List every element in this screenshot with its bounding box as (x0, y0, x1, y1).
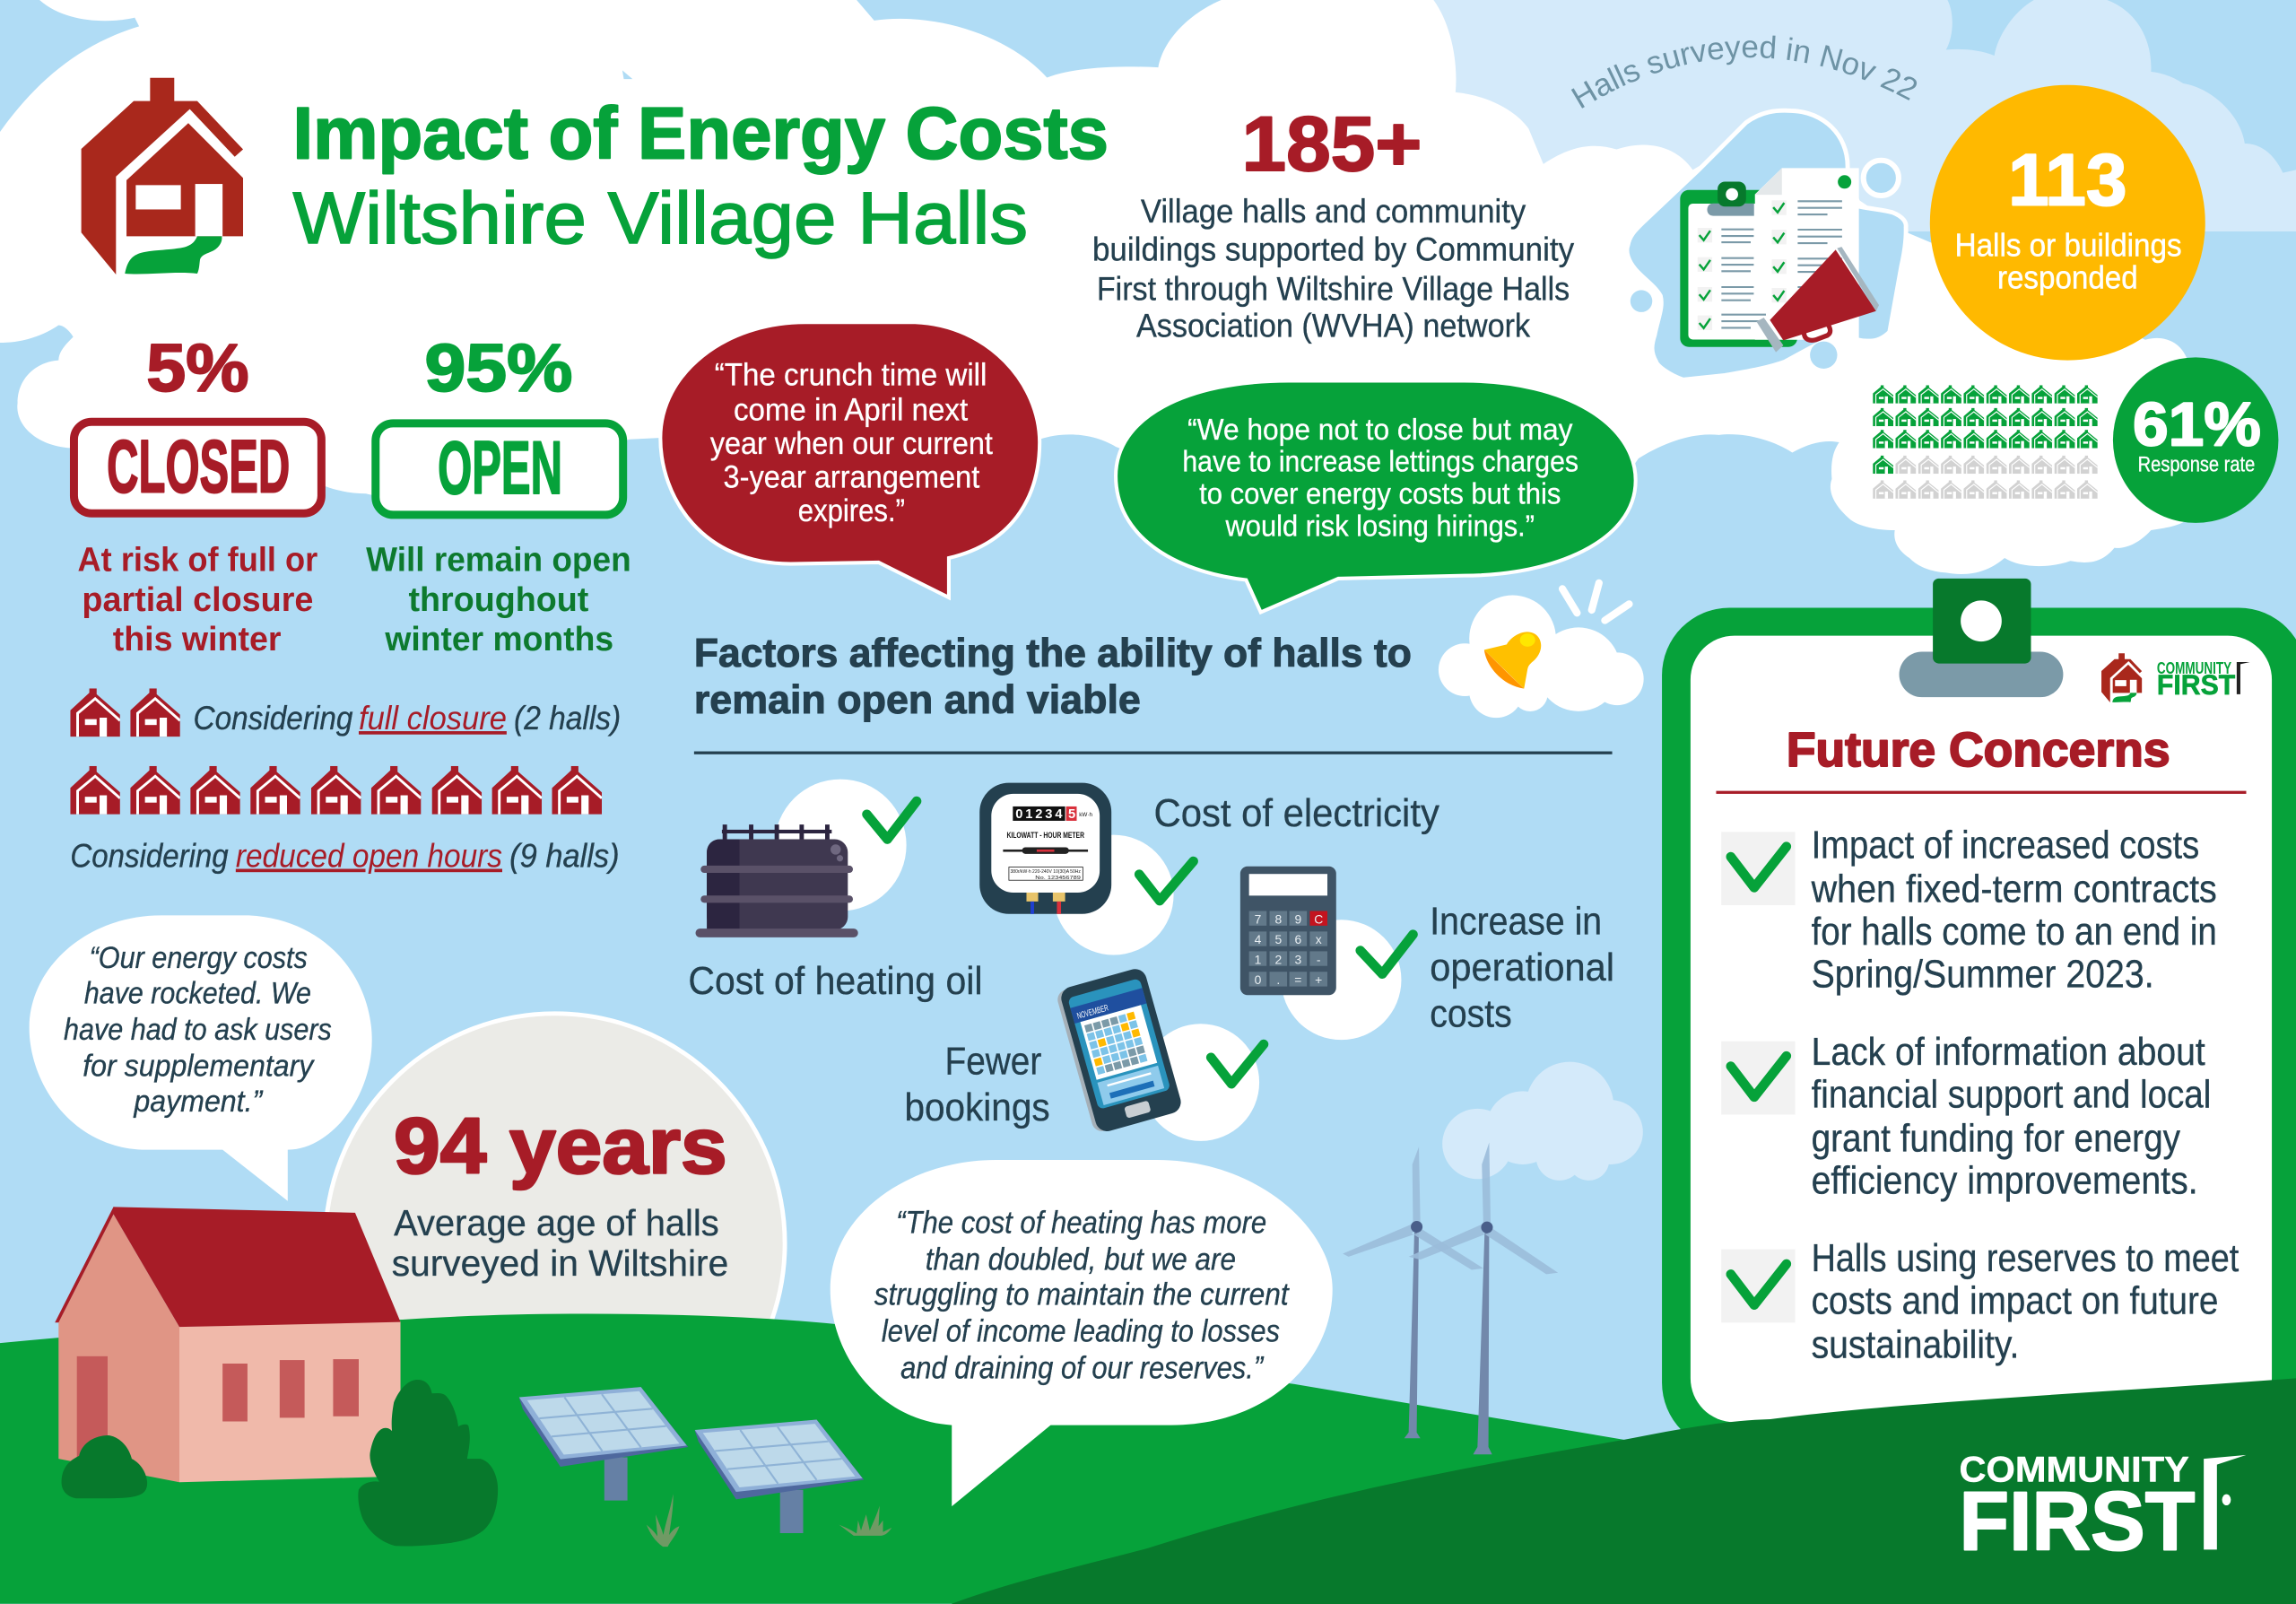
blob behind clipboard (1627, 110, 1906, 379)
check mark (1211, 1044, 1264, 1084)
green circle: 61 percent response rate: 61% (2133, 389, 2261, 458)
closed sign: CLOSED (107, 425, 290, 509)
concern 1: Spring/Summer 2023. (1812, 953, 2154, 996)
icons: 2 halls (70, 688, 180, 737)
full closure label: (2 halls) (514, 700, 621, 737)
label: costs (1430, 992, 1512, 1035)
closed stat (74, 330, 321, 658)
yellow circle: 113 responses: responded (1997, 259, 2138, 296)
concern 1: when fixed-term contracts (1811, 868, 2217, 911)
megaphone (1770, 249, 1876, 340)
concern 3: sustainability. (1812, 1323, 2019, 1366)
clipboard board (1680, 190, 1797, 347)
94 years caption: surveyed in Wiltshire (392, 1242, 728, 1284)
open sign: OPEN (438, 426, 562, 510)
white quote bubble: energy costs: payment.” (133, 1085, 264, 1119)
curved label: halls surveyed: Halls surveyed in Nov 22 (1571, 36, 1918, 109)
icon: calculator: 7 (1255, 911, 1262, 926)
185+ stat (1092, 101, 1575, 344)
reduced hours label (70, 838, 620, 875)
concern 1 (1721, 824, 2217, 996)
green circle: 61 percent response rate (2113, 357, 2278, 523)
concern 2: efficiency improvements. (1812, 1160, 2198, 1203)
185 description (1092, 193, 1575, 344)
concern 3: costs and impact on future (1812, 1279, 2218, 1322)
icon: bell on cloud (1439, 583, 1644, 718)
185 description: Association (WVHA) network (1136, 308, 1531, 344)
hall side wall (58, 1214, 179, 1482)
icon: phone with calendar: NOVEMBER (1076, 1003, 1109, 1022)
icon: electricity meter (979, 783, 1111, 914)
white quote bubble: cost of heating: level of income leading to losses (882, 1314, 1280, 1349)
icon: calculator: 3 (1294, 952, 1301, 966)
94 years caption: Average age of halls (394, 1202, 719, 1243)
white quote bubble: energy costs: “Our energy costs (90, 941, 308, 975)
factors heading: remain open and viable (694, 678, 1141, 722)
icon: phone with calendar (1055, 966, 1184, 1135)
bell cloud (1439, 596, 1644, 718)
bell rays (1562, 583, 1629, 621)
icon: calculator: 4 (1255, 932, 1262, 946)
yellow circle: 113 responses (1930, 85, 2205, 361)
checklist rows (1698, 200, 1842, 330)
check mark (867, 801, 917, 840)
green quote bubble: “We hope not to close but may (1187, 414, 1573, 447)
white disc (775, 780, 907, 911)
white quote bubble: cost of heating: than doubled, but we are (926, 1242, 1236, 1277)
factors heading: Factors affecting the ability of halls to (694, 632, 1412, 676)
community first logo: FIRST (1959, 1474, 2195, 1567)
clipboard clip (1707, 204, 1754, 216)
factors heading (694, 632, 1412, 722)
icon: electricity meter: kW·h (1079, 812, 1092, 818)
closed caption (78, 541, 318, 658)
icon: calculator: 2 (1274, 952, 1282, 966)
concern 2 (1721, 1031, 2211, 1203)
solar panel left (519, 1387, 688, 1501)
checklist paper (1755, 168, 1859, 340)
hall front wall (179, 1321, 401, 1482)
yellow circle: 113 responses: 113 (2008, 140, 2126, 222)
concern 1: Impact of increased costs (1812, 824, 2199, 867)
pictogram: 61 percent of halls (1873, 385, 2098, 499)
wind turbine left (1343, 1146, 1483, 1438)
closed caption: this winter (113, 620, 282, 658)
icon: calculator: . (1276, 972, 1280, 987)
concern 2: grant funding for energy (1812, 1117, 2180, 1160)
reduced hours row (70, 766, 620, 875)
grass tufts (647, 1494, 891, 1547)
icon: calculator: x (1316, 932, 1322, 946)
reduced hours label: reduced open hours (236, 838, 502, 875)
label: Fewer (945, 1041, 1041, 1084)
open caption: Will remain open (366, 541, 631, 579)
white quote bubble: cost of heating: “The cost of heating has more (896, 1206, 1266, 1241)
factor: fewer bookings (904, 966, 1264, 1141)
grey circle: 94 years (325, 1014, 785, 1473)
concern 1: for halls come to an end in (1812, 911, 2217, 954)
icon: main house logo (82, 78, 243, 275)
94 years text (392, 1101, 728, 1284)
full closure row (70, 688, 621, 737)
icons: 9 halls (70, 766, 602, 815)
185 description: buildings supported by Community (1092, 231, 1575, 268)
94 years caption (392, 1202, 728, 1284)
icon: calculator: 8 (1274, 911, 1282, 926)
factor: electricity (979, 783, 1439, 955)
small community first logo: FIRST (2157, 669, 2235, 701)
closed caption: At risk of full or (78, 541, 318, 579)
icon: electricity meter: KILOWATT - HOUR METER (1006, 831, 1084, 840)
green circle: 61 percent response rate: Response rate (2138, 454, 2255, 477)
icon: calculator: C (1314, 911, 1323, 926)
white quote bubble: cost of heating (831, 1160, 1333, 1506)
white disc (1142, 1024, 1259, 1141)
icon: calculator: 6 (1294, 932, 1301, 946)
large bush (358, 1380, 498, 1546)
icon: calculator (1240, 867, 1336, 995)
concern 2: financial support and local (1812, 1073, 2211, 1116)
95 percent: 95% (424, 330, 572, 405)
cloud notch (622, 70, 632, 79)
white quote bubble: energy costs: for supplementary (83, 1049, 315, 1083)
full closure label: full closure (359, 700, 507, 737)
closed sign (74, 422, 321, 513)
bell (1484, 632, 1541, 689)
concern 3: Halls using reserves to meet (1812, 1237, 2239, 1280)
hall roof (55, 1207, 401, 1327)
white quote bubble: energy costs: have rocketed. We (84, 976, 311, 1010)
icon: calculator: = (1294, 972, 1301, 987)
bubble circles (1631, 161, 1899, 369)
label: Cost of heating oil (688, 960, 983, 1003)
community first logo (1959, 1451, 2246, 1567)
open stat (366, 330, 631, 658)
dark green hill (952, 1378, 2296, 1604)
factor: heating oil (688, 780, 983, 1003)
icon: calculator: 0 (1255, 972, 1262, 987)
full closure label: Considering (194, 700, 353, 737)
hall door and windows (77, 1356, 359, 1461)
label: Increase in (1430, 901, 1602, 944)
open caption: throughout (409, 580, 589, 618)
check mark (1139, 861, 1194, 901)
red quote bubble (660, 322, 1039, 597)
white disc (1054, 835, 1174, 955)
red quote bubble: “The crunch time will (715, 357, 987, 392)
icon: calculator: 5 (1274, 932, 1282, 946)
icon: calculator: 1 (1255, 952, 1262, 966)
icon: calculator: - (1317, 952, 1321, 966)
icon: electricity meter: 5 (1068, 807, 1075, 822)
icon: survey clipboard and megaphone (1627, 110, 1906, 379)
icon: oil tank (696, 824, 858, 937)
green quote bubble (1116, 380, 1636, 612)
label: operational (1430, 946, 1614, 989)
icon: calculator: 9 (1294, 911, 1301, 926)
full closure label (194, 700, 621, 737)
title (293, 92, 1109, 259)
title line 1: Impact of Energy Costs (293, 92, 1109, 174)
icon: electricity meter: No. 123456789 (1035, 876, 1081, 881)
red quote bubble: come in April next (734, 393, 968, 428)
white disc (1282, 920, 1401, 1040)
community first logo: COMMUNITY (1959, 1451, 2189, 1490)
concern 3 (1721, 1237, 2239, 1366)
check mark (1361, 935, 1413, 974)
label (904, 1041, 1050, 1129)
icon: calculator: + (1315, 972, 1322, 987)
concern 2: Lack of information about (1812, 1031, 2205, 1074)
green quote bubble: to cover energy costs but this (1199, 478, 1561, 511)
green quote bubble: would risk losing hirings.” (1225, 510, 1535, 544)
red quote bubble: 3-year arrangement (724, 460, 979, 495)
solar panel right (695, 1420, 864, 1533)
icon: electricity meter: 01234 (1015, 807, 1063, 822)
closed caption: partial closure (82, 580, 313, 618)
red quote bubble: expires.” (798, 493, 905, 528)
small bush (62, 1435, 147, 1498)
white quote bubble: cost of heating: and draining of our reserves.” (900, 1350, 1264, 1385)
94 years number: 94 years (394, 1101, 727, 1190)
small community first logo: COMMUNITY (2157, 658, 2232, 677)
factor: operational costs (1240, 867, 1614, 1040)
yellow circle: 113 responses: Halls or buildings (1955, 227, 2182, 264)
small background cloud (1442, 1062, 1643, 1181)
panel heading: Future Concerns (1787, 723, 2170, 777)
185 description: First through Wiltshire Village Halls (1097, 271, 1570, 308)
green quote bubble: have to increase lettings charges (1182, 446, 1578, 479)
clipboard frame (1662, 608, 2296, 1450)
reduced hours label: (9 halls) (509, 838, 620, 875)
reduced hours label: Considering (70, 838, 229, 875)
red quote bubble: year when our current (710, 426, 993, 461)
light background cloud (1405, 0, 2296, 231)
clipboard panel: future concerns (1662, 579, 2296, 1450)
open caption: winter months (384, 620, 613, 658)
185 description: Village halls and community (1141, 193, 1526, 230)
green hill (0, 1313, 1640, 1604)
icon: electricity meter: 380r/kW·h 220-240V 10(30)A 50Hz (1011, 869, 1081, 875)
small community first logo (2101, 653, 2250, 702)
white quote bubble: cost of heating: struggling to maintain the current (874, 1277, 1290, 1312)
5 percent: 5% (146, 330, 249, 405)
label: Cost of electricity (1154, 792, 1439, 835)
title line 2: Wiltshire Village Halls (293, 178, 1028, 259)
label: bookings (904, 1086, 1050, 1129)
wind turbine right (1409, 1142, 1558, 1454)
open caption (366, 541, 631, 658)
clipboard clip (1900, 579, 2063, 697)
open sign (376, 423, 623, 515)
village hall illustration (55, 1207, 498, 1546)
white quote bubble: energy costs (30, 915, 372, 1201)
white quote bubble: energy costs: have had to ask users (64, 1013, 332, 1047)
large white cloud (0, 0, 2226, 574)
label (1430, 901, 1614, 1035)
clipboard paper (1691, 636, 2272, 1422)
185 plus number: 185+ (1241, 101, 1422, 187)
